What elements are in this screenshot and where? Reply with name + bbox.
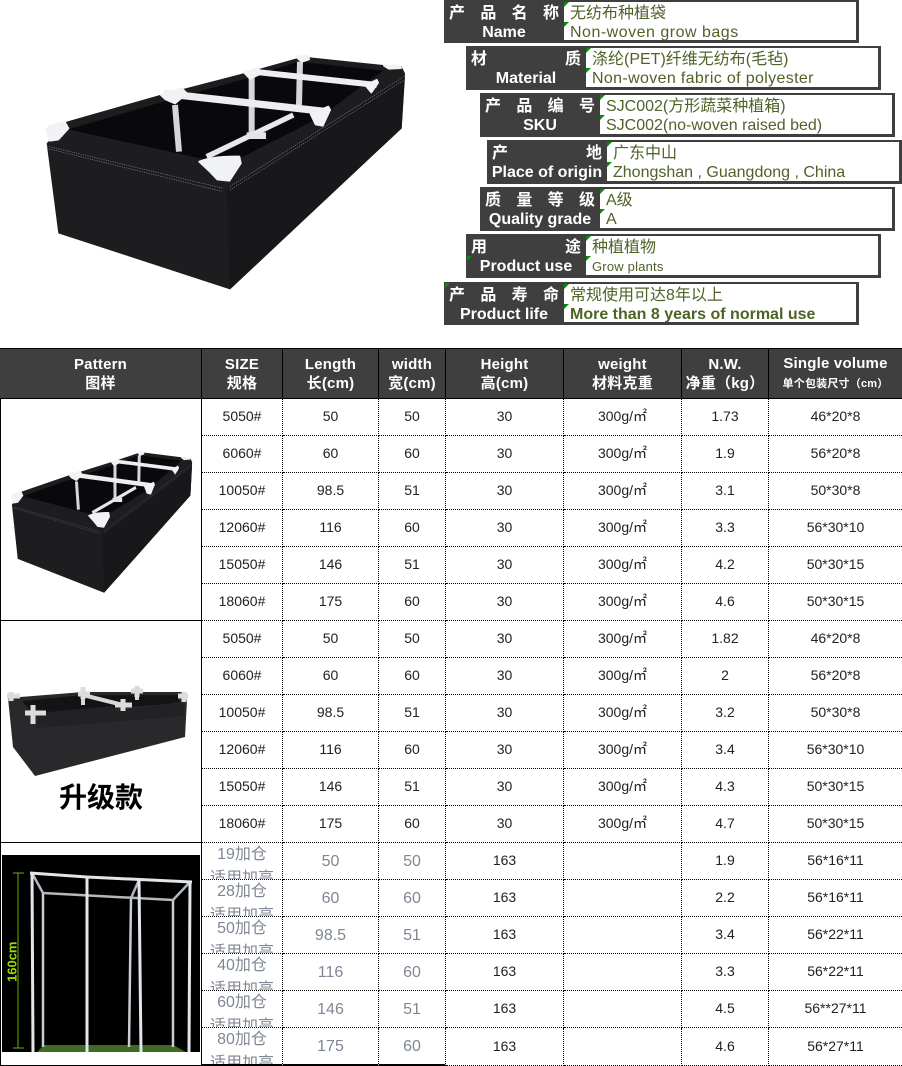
table header row: 18060# [219,593,265,609]
product photo: raised bed with white pipe frame [45,55,405,290]
table header row [0,348,902,1066]
info row: material: 材 [471,51,487,68]
table header row: 51 [404,482,420,498]
info row: name: 名 [512,5,528,22]
info row: quality grade: 等 [548,192,564,209]
standard group rows: 30 [497,408,512,424]
table header row: width [392,356,432,372]
height extension group rows: 56*16*11 [807,852,864,868]
standard group rows: 50 [323,408,338,424]
info row: product use: 途 [565,239,581,256]
table header row: 60 [403,964,421,981]
table header row: 60 [323,667,338,683]
table header row: 300g/㎡ [598,815,647,831]
info row: SKU [480,93,895,137]
table header row: 18060# [219,815,265,831]
table header row: 28加仓 [217,883,267,900]
table header row: 116 [319,741,342,757]
upgraded group rows: 300g/㎡ [598,630,647,646]
info row: SKU: 产 [485,98,501,115]
info row: name [444,0,859,43]
table header row: 98.5 [317,482,344,498]
info row: product life: 常规使用可达8年以上 [570,287,723,304]
table header row: 长(cm) [307,374,354,392]
table header row: 60 [404,815,420,831]
table header row: 50*30*8 [811,482,860,498]
table header row: 10050# [219,704,265,720]
upgraded group rows: 1.82 [711,630,739,646]
upgraded group rows: 50 [404,630,420,646]
table header row: Length [305,356,356,372]
table header row: 51 [404,556,420,572]
table header row: 163 [493,1000,516,1016]
table header row: 图样 [85,374,116,392]
info row: product use [466,234,881,278]
table header row: 15050# [219,556,265,572]
info row: product use: Product use [480,258,572,275]
table header row: 4.2 [715,556,735,572]
table header row: 40加仓 [217,957,267,974]
info row: product life [444,282,859,325]
table header row: 2.2 [715,889,735,905]
info row: SKU: 编 [548,98,564,115]
table header row: SIZE [225,356,259,372]
table header row: Pattern [74,356,127,372]
height extension group rows: 19加仓 [217,846,267,863]
upgraded group rows: 50 [323,630,338,646]
table header row: 60 [404,593,420,609]
table header row: 15050# [219,778,265,794]
height extension group rows: 50 [403,853,421,870]
table header row: 163 [493,889,516,905]
standard group rows: 5050# [223,408,261,424]
table header row: 1.9 [715,445,735,461]
table header row: 300g/㎡ [598,482,647,498]
table header row: 163 [493,1038,516,1054]
table header row: 4.6 [715,593,735,609]
table header row: 50*30*15 [807,778,864,794]
info row: product life: 命 [543,287,559,304]
table header row: 6060# [223,667,261,683]
info row: material [466,46,881,90]
info row: name: 品 [480,5,496,22]
table header row: 30 [497,667,512,683]
table header row: 300g/㎡ [598,519,647,535]
standard group rows: 46*20*8 [811,408,860,424]
table header row: 56**27*11 [804,1000,867,1016]
upgraded group rows [0,621,902,843]
height extension group rows: 163 [493,852,516,868]
table header row: 98.5 [317,704,344,720]
table header row: 300g/㎡ [598,741,647,757]
info row: place of origin: Zhongshan , Guangdong , China [613,164,845,181]
info row: place of origin: Place of origin [492,164,602,181]
height extension group rows [0,843,902,1066]
table header row: 3.1 [715,482,735,498]
table header row: 146 [319,556,342,572]
table header row: 300g/㎡ [598,445,647,461]
table header row: 60 [404,741,420,757]
upgraded group rows: 5050# [223,630,261,646]
info row: product use: 用 [471,239,487,256]
table header row: 56*16*11 [807,889,864,905]
table header row: 175 [317,1038,344,1055]
standard group rows [0,399,902,621]
table header row: N.W. [708,356,742,372]
table header row: 2 [721,667,729,683]
table header row: 51 [403,927,421,944]
info row: name: Name [482,24,526,41]
info row: quality grade: 质 [485,192,501,209]
table header row: 163 [493,963,516,979]
table header row: 50加仓 [217,920,267,937]
info row: material: Material [496,70,556,87]
table header row: 净重（kg） [686,374,764,392]
info row: SKU: 号 [579,98,595,115]
table header row: 高(cm) [481,374,528,392]
table header row: 56*27*11 [807,1038,864,1054]
table header row: 56*30*10 [807,519,864,535]
table header row: 50*30*8 [811,704,860,720]
table header row: 60 [404,667,420,683]
table header row: 60 [404,519,420,535]
table header row: 175 [319,815,342,831]
table header row: 3.3 [715,519,735,535]
upgraded group rows: 46*20*8 [811,630,860,646]
table header row: 300g/㎡ [598,778,647,794]
table header row: 56*22*11 [807,926,864,942]
info row: quality grade: A级 [606,192,633,209]
height extension group rows: 50 [322,853,339,870]
table header row: 3.3 [715,963,735,979]
info row: product life: 品 [480,287,496,304]
table header row: 60 [403,890,421,907]
info row: quality grade [480,187,895,231]
info row: place of origin: 产 [492,145,508,162]
table header row: 60 [323,445,338,461]
table header row: 30 [497,815,512,831]
table header row: 116 [319,519,342,535]
standard group rows: 50 [404,408,420,424]
table header row: weight [598,356,647,372]
upgraded group rows: 30 [497,630,512,646]
table header row: 146 [317,1001,344,1018]
table header row: 30 [497,445,512,461]
table header row: 56*20*8 [811,445,860,461]
info row: SKU: 品 [516,98,532,115]
table image: upgraded raised bed [7,686,188,776]
table header row: 51 [404,778,420,794]
standard group rows: 300g/㎡ [598,408,647,424]
table header row: 56*22*11 [807,963,864,979]
table header row: 300g/㎡ [598,704,647,720]
table header row: 12060# [219,519,265,535]
info row: material: 质 [565,51,581,68]
info row: quality grade: Quality grade [489,211,591,228]
table header row: 3.4 [715,926,735,942]
info row: quality grade: A [606,211,617,228]
upgraded model caption: 升级款 [59,782,143,813]
table image: 160cm extension frame: 160cm [4,942,20,982]
info row: quality grade: 级 [579,192,595,209]
table header row: 宽(cm) [388,374,436,392]
info row: quality grade: 量 [516,192,532,209]
info row: product use: Grow plants [592,259,664,274]
table header row: 80加仓 [217,1031,267,1048]
table header row: 10050# [219,482,265,498]
table header row: 规格 [227,374,257,392]
standard group rows: 1.73 [711,408,739,424]
table header row: 60 [322,890,339,907]
table header row: Single volume [783,354,888,372]
info row: place of origin: 地 [586,145,602,162]
info row: material: Non-woven fabric of polyester [592,70,814,87]
table header row: 116 [318,964,343,981]
specification table [0,348,902,1066]
table header row: 56*20*8 [811,667,860,683]
info row: place of origin: 广东中山 [613,145,677,162]
info row: product life: 寿 [512,287,528,304]
table header row: 50*30*15 [807,593,864,609]
table header row: 30 [497,704,512,720]
info row: material: 涤纶(PET)纤维无纺布(毛毡) [592,51,788,68]
info row: name: 无纺布种植袋 [570,5,666,22]
table header row: 60 [403,1038,421,1055]
table header row: Height [481,356,528,372]
table header row: 50*30*15 [807,556,864,572]
table header row: 3.4 [715,741,735,757]
info row: name: Non-woven grow bags [570,24,739,41]
table header row: 4.3 [715,778,735,794]
table header row: 12060# [219,741,265,757]
table header row: 98.5 [315,927,346,944]
table header row: 175 [319,593,342,609]
table header row: 4.5 [715,1000,735,1016]
table image: standard raised bed [11,452,192,593]
table header row: 51 [404,704,420,720]
info row: name: 称 [543,5,559,22]
table header row: 30 [497,556,512,572]
info row: product life: More than 8 years of normal use [570,306,815,323]
table header row: 30 [497,778,512,794]
table header row: 6060# [223,445,261,461]
table header row: 163 [493,926,516,942]
info row: name: 产 [449,5,465,22]
table header row: 300g/㎡ [598,593,647,609]
info row: product use: 种植植物 [592,239,656,256]
info row: product life: 产 [449,287,465,304]
info row: place of origin [487,140,902,184]
table header row: 材料克重 [592,374,653,392]
table header row: 4.6 [715,1038,735,1054]
table header row: 3.2 [715,704,735,720]
table header row: 300g/㎡ [598,556,647,572]
table header row: 51 [403,1001,421,1018]
info row: SKU: SJC002(no-woven raised bed) [606,117,822,134]
table header row: 146 [319,778,342,794]
table header row: 30 [497,519,512,535]
table header row: 4.7 [715,815,735,831]
height extension group rows: 1.9 [715,852,735,868]
table header row: 60加仓 [217,994,267,1011]
info row: product life: Product life [460,306,548,323]
table header row: 50*30*15 [807,815,864,831]
table header row: 30 [497,593,512,609]
info row: SKU: SJC002(方形蔬菜种植箱) [606,98,786,115]
table header row: 60 [404,445,420,461]
info row: SKU: SKU [523,117,557,134]
table header row: 56*30*10 [807,741,864,757]
table header row: 30 [497,482,512,498]
table header row: 单个包装尺寸（cm） [783,378,888,390]
table header row: 30 [497,741,512,757]
table header row: 300g/㎡ [598,667,647,683]
table image: 160cm extension frame [2,855,200,1052]
